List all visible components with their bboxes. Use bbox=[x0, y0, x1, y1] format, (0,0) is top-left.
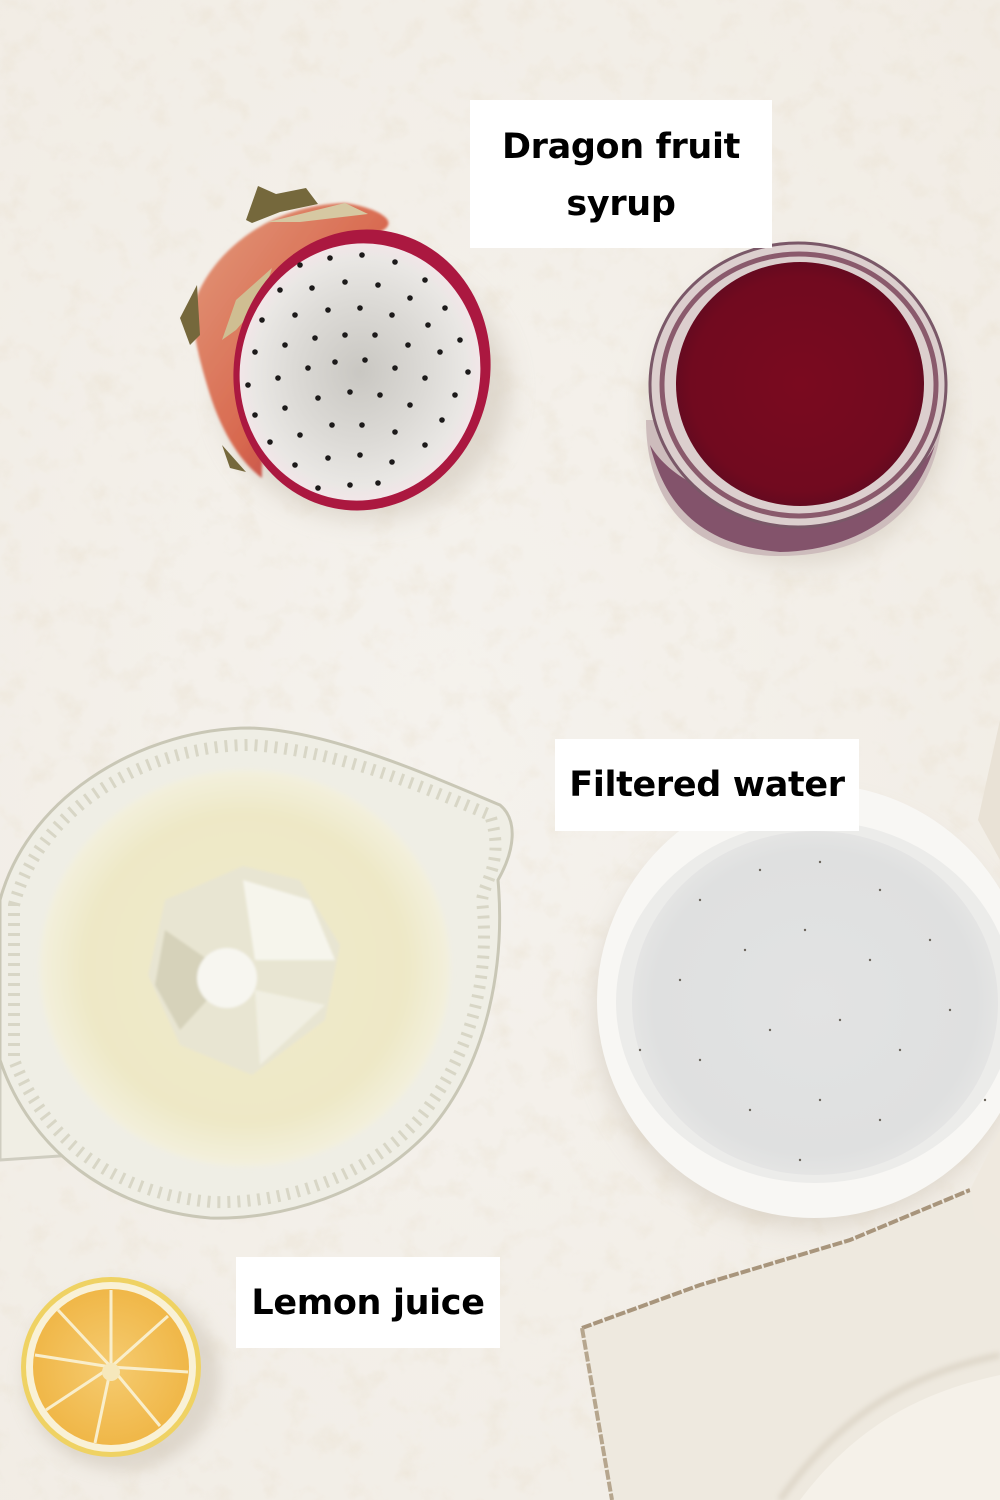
speckles bbox=[639, 861, 986, 1161]
label: Dragon fruit syrup: Dragon fruit bbox=[502, 127, 740, 167]
icon: bowl of filtered water bbox=[595, 784, 1000, 1227]
label: Dragon fruit syrup bbox=[470, 100, 772, 248]
label: Lemon juice: Lemon juice bbox=[251, 1283, 485, 1323]
label: Filtered water bbox=[555, 739, 859, 831]
icon: lemon half bbox=[21, 1277, 220, 1470]
icon: glass lemon juicer bbox=[0, 728, 512, 1218]
juicer cone bbox=[148, 866, 340, 1075]
label: Filtered water: Filtered water bbox=[569, 765, 845, 805]
label: Dragon fruit syrup: syrup bbox=[566, 184, 676, 224]
icon: syrup jar bbox=[646, 243, 950, 565]
glass ribs bbox=[14, 745, 496, 1202]
icon: dragon fruit bbox=[180, 186, 517, 535]
icon: linen napkin bbox=[582, 720, 1000, 1500]
label: Lemon juice bbox=[236, 1257, 500, 1348]
segment lines bbox=[35, 1290, 188, 1443]
seeds bbox=[245, 252, 471, 491]
